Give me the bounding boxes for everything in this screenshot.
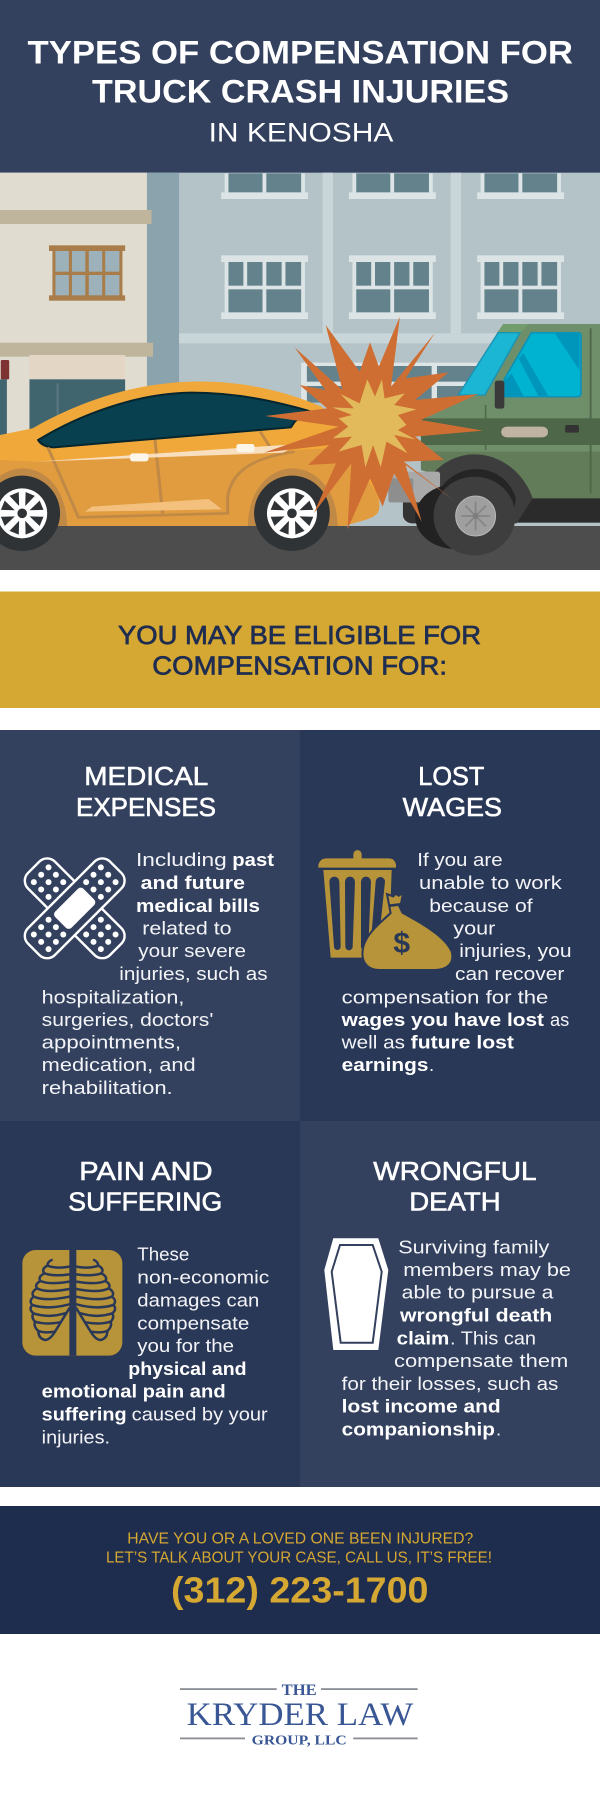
logo: The Kryder Law Group: KRYDER LAW (187, 1697, 414, 1733)
panel: wrongful death (300, 1121, 600, 1487)
truck (388, 324, 600, 555)
text: pain and suffering: caused by your (132, 1404, 268, 1425)
logo: The Kryder Law Group: THE (282, 1682, 317, 1699)
text: wrongful death: . This can (450, 1327, 536, 1348)
text: pain and suffering: damages can (137, 1290, 259, 1311)
text: pain and suffering: emotional pain and (42, 1381, 226, 1402)
text: wrongful death: lost income and (342, 1396, 501, 1417)
icon: rib cage (22, 1250, 122, 1356)
text: medical expenses: medication, and (42, 1054, 196, 1075)
text: wrongful death: able to pursue a (402, 1282, 554, 1303)
text: lost wages: wages you have lost (341, 1009, 544, 1030)
heading: pain and suffering: PAIN AND (79, 1156, 213, 1186)
road (0, 526, 600, 570)
text: lost wages: earnings (342, 1054, 428, 1075)
heading: pain and suffering (68, 1156, 222, 1217)
text: wrongful death (342, 1236, 571, 1440)
subtitle: IN KENOSHA (209, 118, 393, 148)
text: lost wages: well as (341, 1031, 405, 1052)
heading: lost wages: LOST (418, 761, 484, 791)
text: pain and suffering: suffering (42, 1404, 127, 1425)
text: pain and suffering: These (137, 1244, 189, 1265)
text: medical expenses: medical bills (136, 895, 260, 916)
text: medical expenses: past (232, 849, 274, 870)
text: medical expenses: related to (142, 917, 232, 938)
text: pain and suffering (42, 1244, 269, 1448)
car (0, 382, 379, 551)
text: pain and suffering: physical and (128, 1358, 247, 1379)
phone number: (312) 223-1700 (171, 1570, 428, 1611)
title: TRUCK CRASH INJURIES (92, 73, 509, 109)
icon: crossed bandages (20, 854, 129, 963)
text: lost wages: If you are (417, 849, 503, 870)
text: medical expenses: hospitalization, (42, 986, 184, 1007)
logo: The Kryder Law Group (180, 1682, 418, 1748)
panel: lost wages (300, 730, 600, 1121)
background building (0, 173, 600, 527)
heading: medical expenses (76, 761, 216, 822)
text: medical expenses: surgeries, doctors' (42, 1009, 213, 1030)
text: wrongful death: wrongful death (399, 1305, 552, 1326)
text: medical expenses: rehabilitation. (42, 1077, 173, 1098)
foreground building (0, 173, 153, 456)
heading: pain and suffering: SUFFERING (68, 1187, 222, 1217)
explosion (264, 317, 483, 529)
text: medical expenses: your severe (138, 940, 246, 961)
panel: medical expenses (0, 730, 300, 1121)
heading: wrongful death (373, 1156, 537, 1217)
text: lost wages: as (550, 1009, 569, 1030)
text: lost wages: unable to work (419, 872, 563, 893)
text: pain and suffering: compensate (137, 1312, 249, 1333)
banner: eligibility: COMPENSATION FOR: (152, 651, 447, 681)
text: wrongful death: claim (397, 1327, 449, 1348)
text: lost wages: your (453, 917, 495, 938)
title: TYPES OF COMPENSATION FOR (28, 34, 573, 70)
illustration: truck crash street scene (0, 173, 600, 570)
heading: lost wages (403, 761, 502, 822)
text: lost wages: . (429, 1054, 434, 1075)
text: pain and suffering: you for the (137, 1335, 234, 1356)
icon: coffin (324, 1238, 388, 1350)
text: wrongful death: compensate them (394, 1350, 568, 1371)
text: lost wages: injuries, you (459, 940, 572, 961)
icon: trash can and money bag (318, 850, 451, 969)
text: medical expenses: and future (141, 872, 245, 893)
rear wheel (0, 468, 67, 551)
text: medical expenses: injuries, such as (119, 963, 268, 984)
icon: trash can and money bag: $ (393, 927, 410, 960)
text: wrongful death: Surviving family (398, 1236, 550, 1257)
text: pain and suffering: non-economic (137, 1266, 269, 1287)
text: wrongful death: . (496, 1419, 501, 1440)
heading: wrongful death: WRONGFUL (373, 1156, 537, 1186)
text: lost wages: because of (429, 895, 534, 916)
text: lost wages: future lost (411, 1031, 514, 1052)
header (0, 0, 600, 173)
text: lost wages: compensation for the (342, 986, 548, 1007)
heading: wrongful death: DEATH (409, 1187, 501, 1217)
panel: pain and suffering (0, 1121, 300, 1487)
text: wrongful death: companionship (342, 1419, 495, 1440)
title (28, 34, 573, 109)
text: lost wages: can recover (455, 963, 564, 984)
text: wrongful death: members may be (403, 1259, 571, 1280)
banner: eligibility: YOU MAY BE ELIGIBLE FOR (118, 620, 481, 650)
text: lost wages (341, 849, 572, 1075)
text: medical expenses: appointments, (42, 1031, 181, 1052)
heading: medical expenses: MEDICAL (84, 761, 208, 791)
heading: lost wages: WAGES (403, 792, 502, 822)
logo: The Kryder Law Group: GROUP, LLC (252, 1733, 347, 1748)
text: pain and suffering: injuries. (42, 1427, 110, 1448)
text: medical expenses (42, 849, 274, 1098)
text: medical expenses: Including (136, 849, 227, 870)
front wheel (248, 468, 337, 551)
text: wrongful death: for their losses, such as (342, 1373, 558, 1394)
banner: eligibility (0, 592, 600, 708)
call to action (0, 1506, 600, 1634)
call to action: LET’S TALK ABOUT YOUR CASE, CALL US, IT’S FREE! (106, 1549, 492, 1566)
heading: medical expenses: EXPENSES (76, 792, 216, 822)
call to action: HAVE YOU OR A LOVED ONE BEEN INJURED? (127, 1530, 473, 1547)
